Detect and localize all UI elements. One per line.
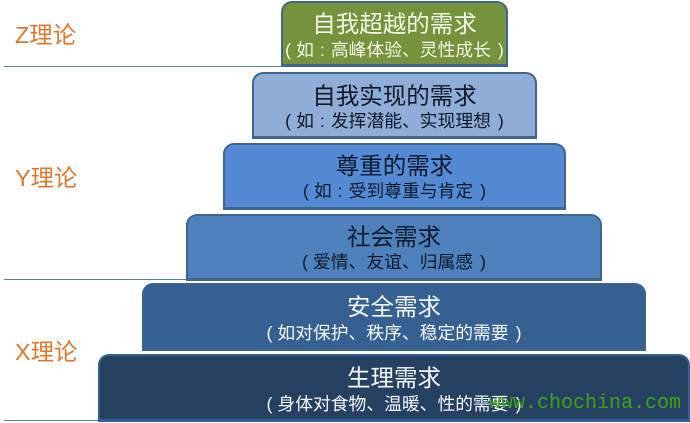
tier: self-transcendence: : [320, 40, 325, 60]
tier: esteem [223, 143, 566, 210]
tier: social [186, 214, 602, 281]
tier: safety: ( 如对保护、秩序、稳定的需要 ) [266, 323, 522, 343]
tier: esteem: : [338, 181, 343, 201]
tier: social: ( 爱情、友谊、归属感 ) [302, 252, 486, 272]
label: Y theory: Y理论 [15, 165, 77, 191]
tier: physiological: 生理需求 [347, 365, 441, 391]
tier: physiological: ( 身体对食物、温暖、性的需要 ) [266, 394, 522, 414]
tier: social: 社会需求 [347, 224, 441, 250]
label: Z theory: Z理论 [15, 22, 76, 48]
label: X theory: X理论 [15, 339, 77, 365]
tier: esteem: 尊重的需求 [336, 153, 453, 179]
tier: self-actualization [252, 72, 537, 139]
tier: self-actualization: ( 如 发挥潜能、实现理想 ) [285, 111, 504, 131]
tier: physiological [98, 354, 690, 422]
tier: self-transcendence [281, 1, 508, 67]
tier: safety [142, 283, 646, 351]
tier: self-transcendence: ( 如 高峰体验、灵性成长 ) [285, 40, 504, 60]
tier: self-transcendence: 自我超越的需求 [312, 11, 477, 37]
tier: self-actualization: : [320, 111, 325, 131]
tier: self-actualization: 自我实现的需求 [312, 83, 477, 109]
tier: safety: 安全需求 [347, 294, 441, 320]
tier: esteem: ( 如 受到尊重与肯定 ) [303, 181, 486, 201]
watermark: www.chochina.com [489, 392, 681, 415]
